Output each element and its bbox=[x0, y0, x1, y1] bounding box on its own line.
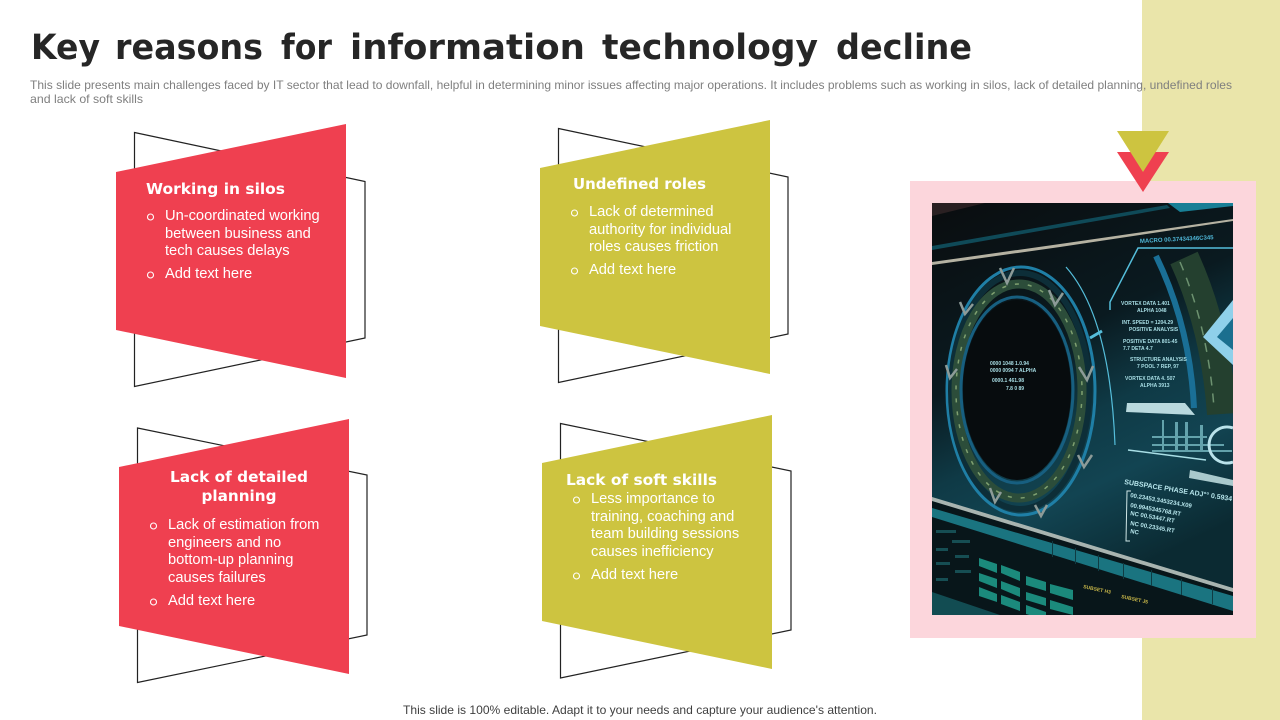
text: silos bullets: Add text here bbox=[165, 266, 252, 282]
screen text: POSITIVE DATA 801-45 bbox=[1123, 339, 1178, 345]
text: planning bullets: Add text here bbox=[168, 593, 255, 609]
text: silos bullets: tech causes delays bbox=[165, 243, 290, 259]
screen text: VORTEX DATA 1.401 bbox=[1121, 301, 1170, 307]
screen text: POSITIVE ANALYSIS bbox=[1129, 327, 1179, 333]
photo: futuristic control screen: 00.9945345768.RT bbox=[1130, 503, 1182, 518]
text: planning bullets: bottom-up planning bbox=[168, 552, 293, 568]
right panel outline bbox=[1066, 248, 1233, 445]
title: reasons bbox=[115, 28, 263, 68]
heading: lack of detailed planning: Lack of detailed bbox=[170, 468, 308, 486]
text: roles bullets: authority for individual bbox=[589, 222, 731, 238]
title: technology bbox=[602, 28, 818, 68]
title: decline bbox=[836, 28, 972, 68]
title: for bbox=[281, 28, 333, 68]
text: planning bullets bbox=[150, 517, 319, 609]
screen text: 0000 1048 1.0.94 bbox=[990, 361, 1029, 367]
text: roles bullets: Lack of determined bbox=[589, 204, 714, 220]
screen text: INT. SPEED = 1204.29 bbox=[1122, 320, 1173, 326]
panel: lack of detailed planning bbox=[119, 419, 367, 682]
screen text: 0000 0094 7 ALPHA bbox=[990, 368, 1037, 374]
ring chevrons bbox=[946, 268, 1093, 516]
heading: lack of detailed planning: planning bbox=[202, 487, 276, 505]
text: planning bullets: engineers and no bbox=[168, 535, 281, 551]
histogram bbox=[1152, 420, 1232, 452]
photo: futuristic control screen bbox=[932, 203, 1233, 620]
icon: stacked triangles bbox=[1117, 131, 1169, 192]
subtitle bbox=[30, 79, 1232, 106]
heading: working in silos: Working in silos bbox=[146, 180, 285, 198]
text: planning bullets: causes failures bbox=[168, 570, 266, 586]
screen text: STRUCTURE ANALYSIS bbox=[1130, 357, 1188, 363]
screen text: ALPHA 3913 bbox=[1140, 383, 1170, 389]
text: silos bullets: between business and bbox=[165, 226, 311, 242]
photo: futuristic control screen: NC 00.23345.RT bbox=[1130, 521, 1175, 535]
subtitle: and lack of soft skills bbox=[30, 93, 143, 106]
screen text: 7.8 0 89 bbox=[1006, 386, 1024, 392]
heading: lack of detailed planning bbox=[170, 468, 308, 505]
footer note: This slide is 100% editable. Adapt it to your needs and capture your audience's attention. bbox=[403, 703, 877, 717]
photo frame bbox=[910, 181, 1256, 638]
text: roles bullets: Add text here bbox=[589, 262, 676, 278]
screen text: 7 POOL 7 REP, 97 bbox=[1137, 364, 1179, 370]
text: soft skills bullets bbox=[574, 491, 739, 583]
text: silos bullets bbox=[148, 208, 320, 282]
text: soft skills bullets: training, coaching and bbox=[591, 509, 734, 525]
photo: futuristic control screen: SUBSET J5 bbox=[1121, 594, 1149, 606]
text: roles bullets: roles causes friction bbox=[589, 239, 718, 255]
text: roles bullets bbox=[572, 204, 731, 278]
title: information bbox=[350, 28, 585, 68]
text: soft skills bullets: team building sessions bbox=[591, 526, 739, 542]
screen text bbox=[990, 235, 1214, 392]
photo: futuristic control screen: NC 00.53447.RT bbox=[1130, 511, 1175, 525]
panel: working in silos bbox=[116, 124, 365, 386]
panel: lack of soft skills bbox=[542, 415, 791, 678]
screen text: ALPHA 1048 bbox=[1137, 308, 1167, 314]
screen text: MACRO 00.37434346C345 bbox=[1140, 235, 1214, 245]
screen text: VORTEX DATA 4. 507 bbox=[1125, 376, 1175, 382]
photo: futuristic control screen: 00.23453.3453234.X09 bbox=[1130, 493, 1193, 510]
green buttons bbox=[979, 558, 1073, 620]
heading: undefined roles: Undefined roles bbox=[573, 175, 706, 193]
screen text: 0000.1 461.98 bbox=[992, 378, 1024, 384]
photo: futuristic control screen: SUBSET H3 bbox=[1083, 584, 1111, 596]
background accent column bbox=[1142, 0, 1280, 720]
photo: futuristic control screen: SUBSPACE PHASE ADJ°° 0.5934 bbox=[1124, 478, 1233, 503]
subtitle: This slide presents main challenges faced by IT sector that lead to downfall, helpful in determining minor issues affecting major operations. It includes problems such as working in silos, lack of detailed planning, undefined roles bbox=[30, 79, 1232, 92]
bottom band bbox=[932, 498, 1233, 615]
text: planning bullets: Lack of estimation from bbox=[168, 517, 319, 533]
text: silos bullets: Un-coordinated working bbox=[165, 208, 320, 224]
text: soft skills bullets: Add text here bbox=[591, 567, 678, 583]
photo: futuristic control screen: NC bbox=[1130, 529, 1140, 537]
ring bbox=[947, 267, 1095, 515]
screen text: 7.7 DETA 4.7 bbox=[1123, 346, 1153, 352]
text: soft skills bullets: causes inefficiency bbox=[591, 544, 714, 560]
title: Key bbox=[31, 28, 100, 68]
panel: undefined roles bbox=[540, 120, 788, 382]
title bbox=[31, 28, 972, 68]
text: soft skills bullets: Less importance to bbox=[591, 491, 715, 507]
heading: lack of soft skills: Lack of soft skills bbox=[566, 471, 717, 489]
